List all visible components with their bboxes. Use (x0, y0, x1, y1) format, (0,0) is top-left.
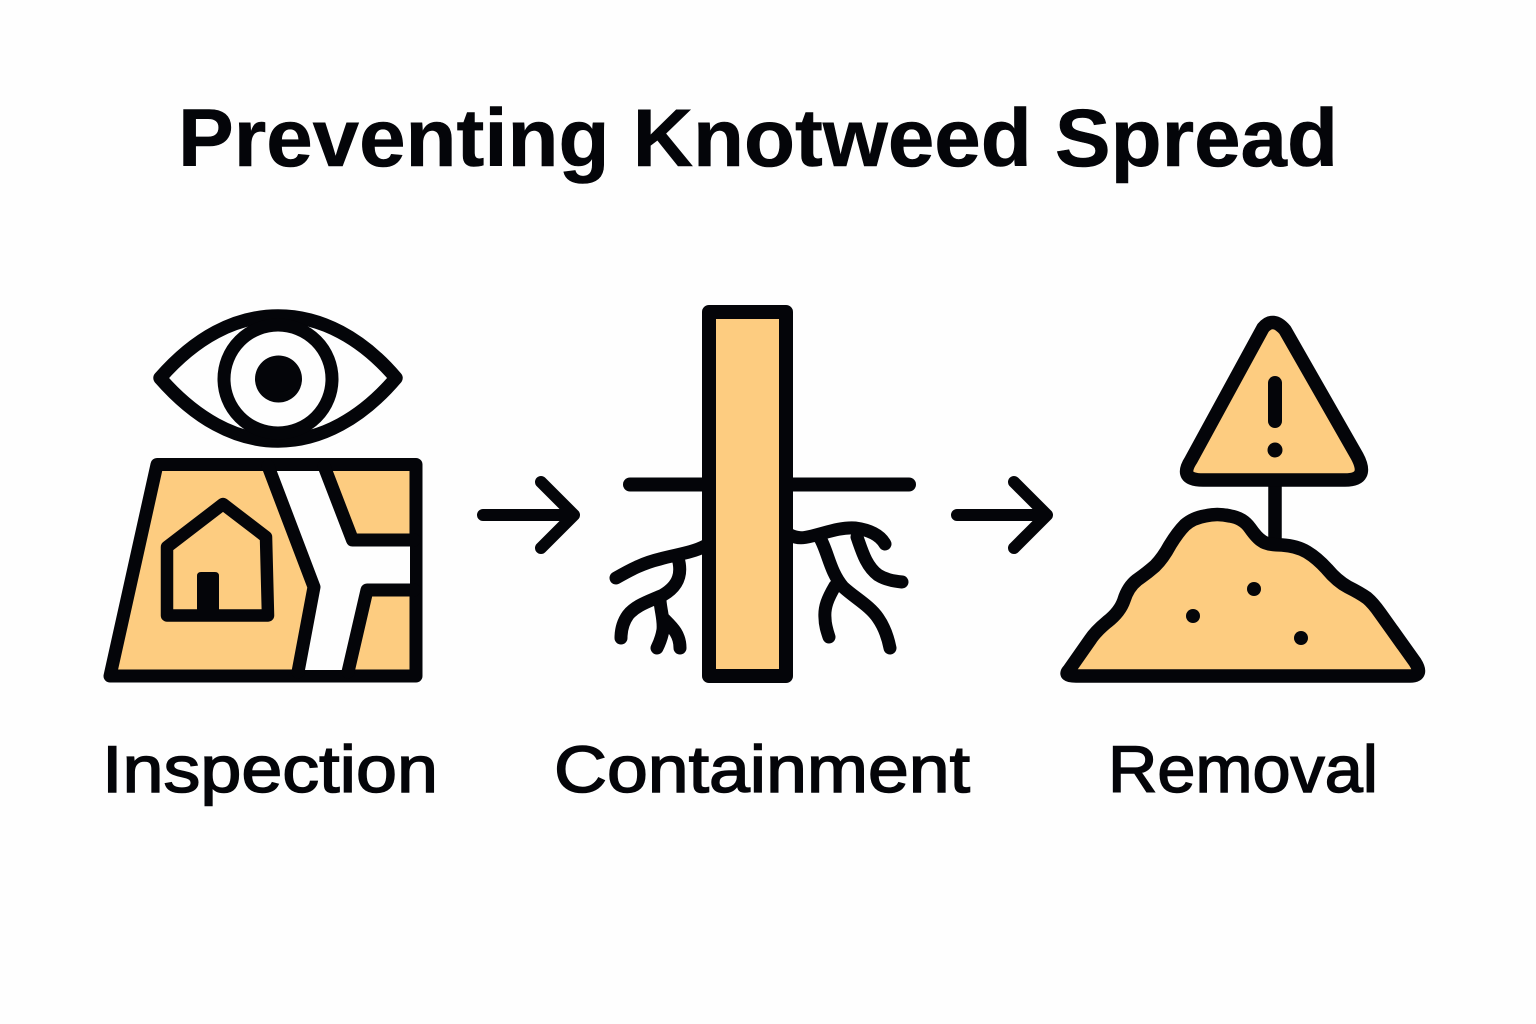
icon: inspection eye over map (110, 316, 416, 676)
icon: removal soil pile with warning sign (1067, 322, 1419, 676)
map road (268, 471, 410, 670)
left roots (616, 546, 705, 648)
ground line (630, 478, 909, 492)
house on map (167, 504, 268, 616)
eye outline (160, 316, 396, 441)
soil pile (1067, 514, 1419, 676)
map base (110, 464, 416, 676)
eye iris (224, 325, 332, 433)
road edges (268, 466, 414, 672)
right roots (790, 528, 902, 648)
house door (197, 572, 219, 612)
arrow: containment to removal (957, 482, 1047, 548)
soil specks (1186, 582, 1308, 645)
arrow: inspection to containment (483, 482, 574, 548)
label: Containment: Containment (554, 732, 970, 806)
icon: containment barrier with roots (616, 312, 909, 676)
sign post (1268, 484, 1282, 545)
label: Removal: Removal (1108, 732, 1378, 806)
warning triangle (1187, 322, 1361, 480)
label: Inspection: Inspection (102, 732, 438, 806)
exclamation dot (1268, 442, 1282, 458)
title: Preventing Knotweed Spread (178, 93, 1338, 184)
barrier (709, 312, 786, 676)
exclamation bar (1268, 383, 1282, 421)
eye pupil (255, 356, 302, 402)
